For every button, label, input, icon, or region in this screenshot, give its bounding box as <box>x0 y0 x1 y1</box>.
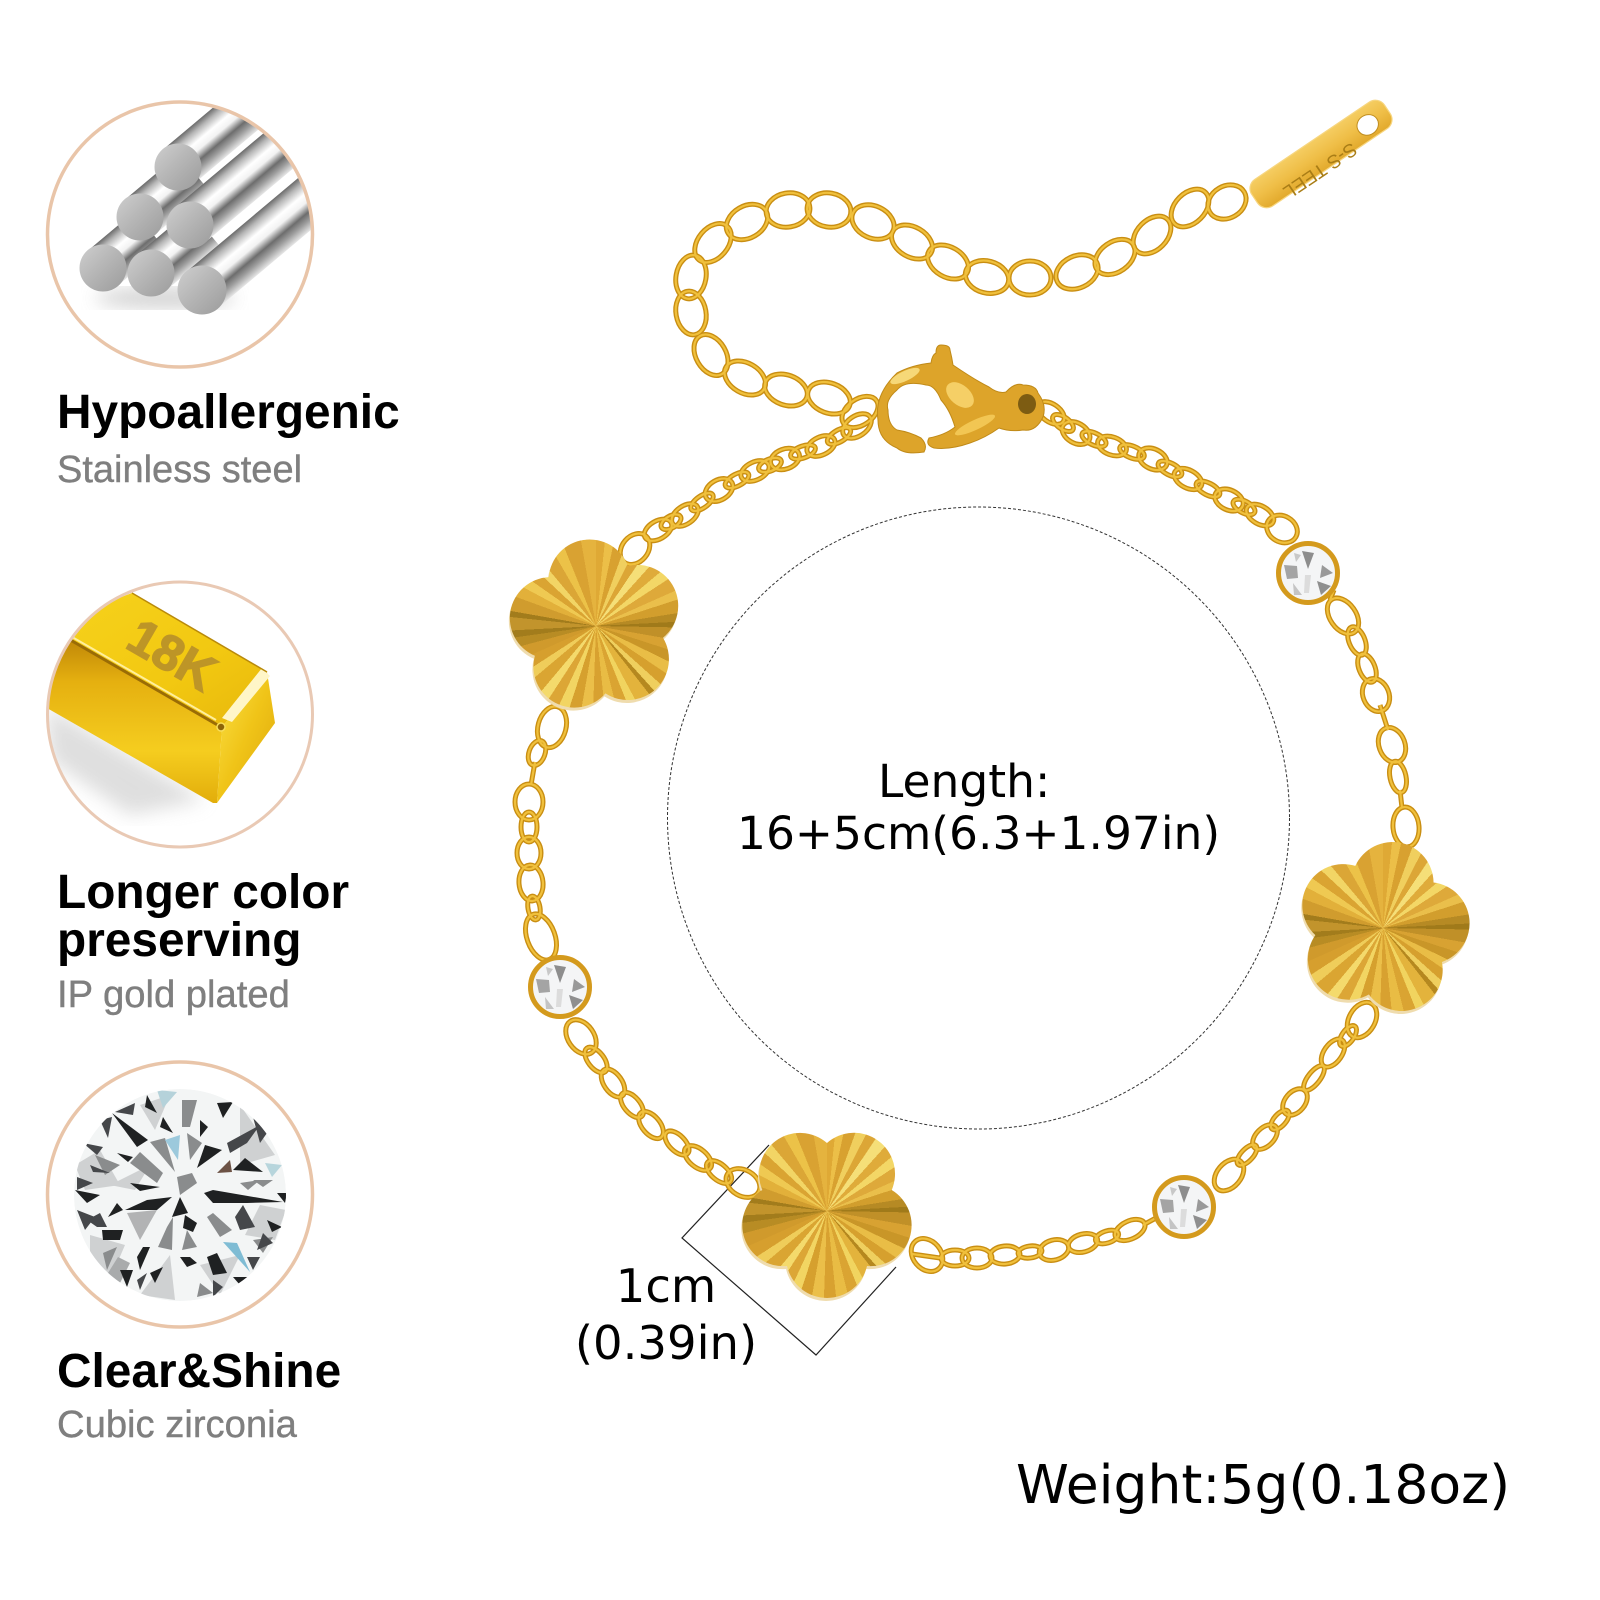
heading: Longer color preserving: preserving <box>57 914 301 967</box>
panel: cubic zirconia feature <box>48 1062 341 1446</box>
dimension bracket: flower width <box>682 1145 896 1355</box>
text: length measurement: 16+5cm(6.3+1.97in) <box>737 807 1220 860</box>
text: IP gold plated: IP gold plated <box>57 973 290 1016</box>
stone: lower right <box>1154 1178 1214 1236</box>
text: length measurement: Length: <box>878 755 1050 808</box>
panel: gold plating feature <box>40 582 349 1016</box>
extender tag: S-S TEEL: S-S TEEL <box>1279 138 1360 202</box>
chain: extender and bracelet links <box>515 178 1421 1278</box>
flower charm: left <box>508 540 678 711</box>
stone: left <box>530 958 590 1016</box>
icon ring: gold <box>48 582 312 847</box>
dashed length circle <box>668 507 1290 1129</box>
flower charm: bottom <box>741 1132 912 1301</box>
text: Stainless steel: Stainless steel <box>57 449 302 491</box>
heading: Hypoallergenic: Hypoallergenic <box>57 386 400 439</box>
icon ring: steel <box>48 102 312 367</box>
heading: Longer color preserving: Longer color <box>57 866 349 919</box>
icon: steel rods <box>80 108 310 314</box>
lobster clasp <box>877 345 1044 453</box>
stone: upper right <box>1278 544 1338 602</box>
heading: Clear&Shine: Clear&Shine <box>57 1345 341 1398</box>
panel: stainless steel feature <box>48 72 400 491</box>
text: Cubic zirconia: Cubic zirconia <box>57 1403 298 1446</box>
text: weight: Weight:5g(0.18oz) <box>1016 1453 1510 1516</box>
text: flower size: (0.39in) <box>575 1316 757 1370</box>
icon ring: diamond <box>48 1062 312 1327</box>
text: flower size: 1cm <box>616 1259 716 1313</box>
icon: brilliant-cut diamond <box>74 1089 287 1301</box>
extender tag: S-S TEEL <box>1246 96 1400 218</box>
engraved mark: 18K: 18K <box>118 608 226 702</box>
flower charm: right <box>1301 842 1470 1014</box>
icon: 18K gold bar <box>40 593 275 815</box>
